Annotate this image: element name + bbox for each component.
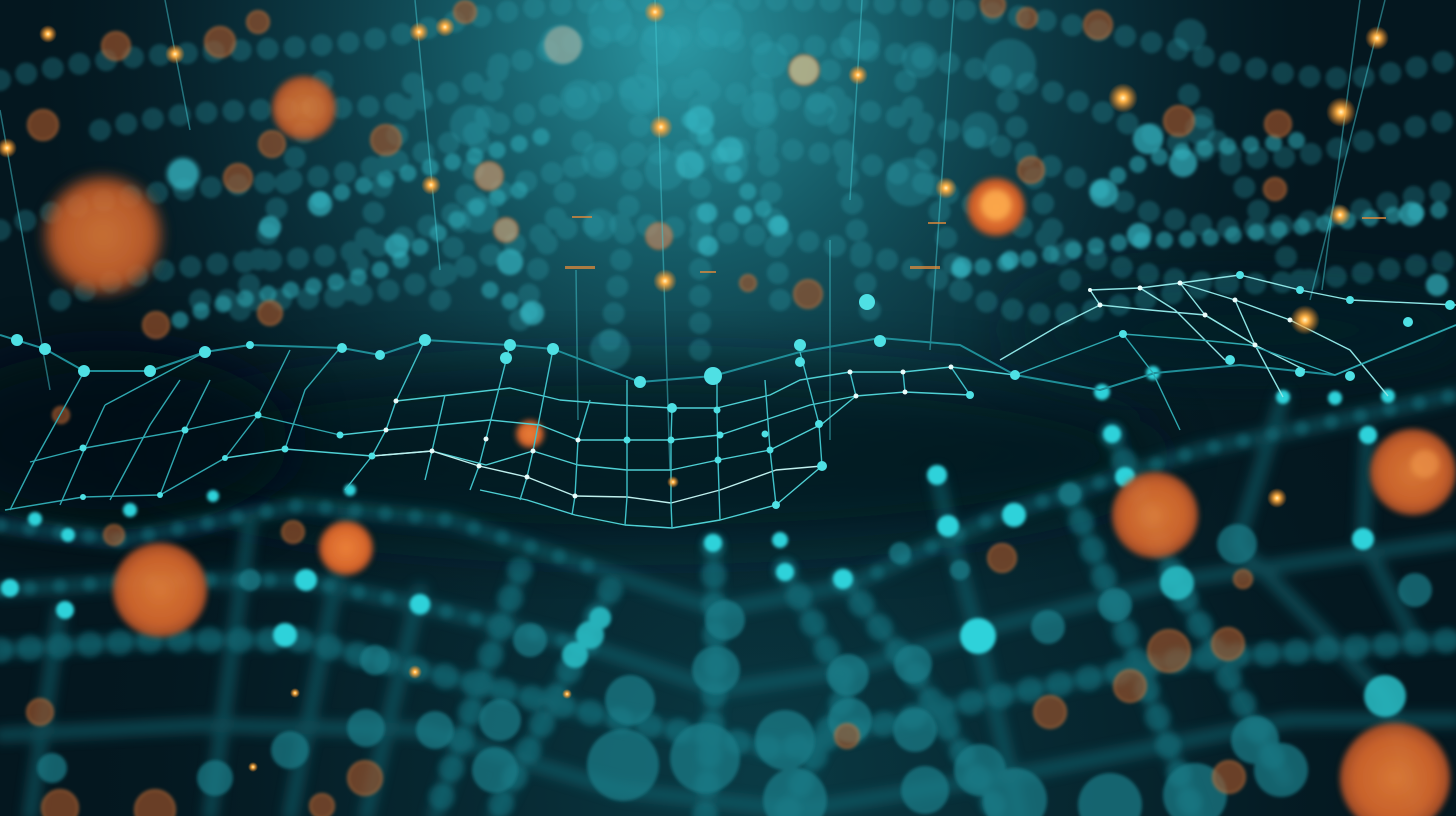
sharp wire mesh	[0, 275, 1456, 528]
mesh: right section	[1000, 275, 1456, 430]
mesh: left section	[5, 348, 340, 510]
mesh nodes	[11, 271, 1455, 509]
mesh: centre rows	[225, 367, 1015, 528]
lower blurred grid	[0, 395, 1456, 816]
lower bokeh strings	[0, 395, 1456, 816]
vertical light filaments	[0, 0, 1385, 470]
upper teal bokeh field	[165, 0, 1448, 370]
upper bokeh strings	[0, 0, 1456, 350]
lower teal bokeh dots	[1, 366, 1432, 816]
mesh: centre columns	[345, 340, 970, 528]
mesh: top ridge line	[0, 325, 1456, 390]
small orange dashes	[565, 216, 1386, 273]
